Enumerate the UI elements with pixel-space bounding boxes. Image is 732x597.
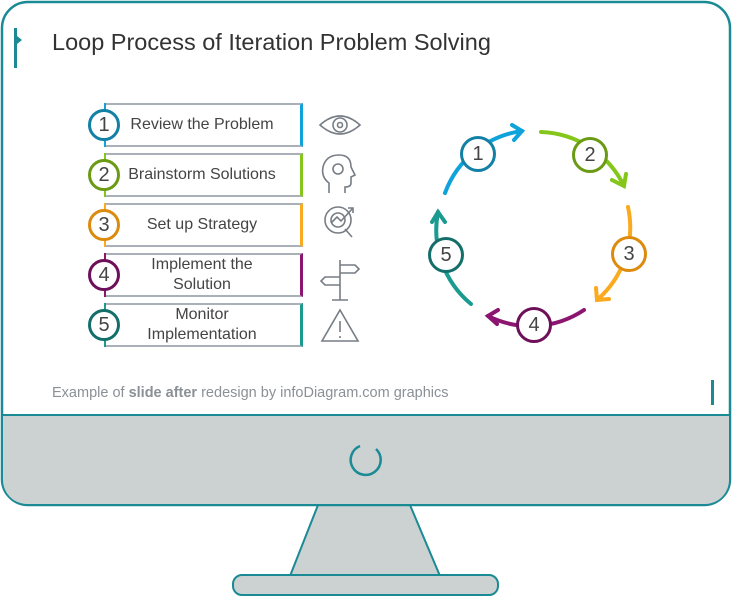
step list: Implementation	[147, 326, 257, 343]
cycle nodes: 2	[584, 144, 596, 166]
icons	[318, 115, 362, 342]
icon: power button	[351, 446, 381, 475]
step list: 5	[98, 314, 110, 336]
arc 1	[445, 125, 522, 193]
footer caption: Example of slide after redesign by infoDiagram.com graphics	[52, 385, 449, 401]
icon: target	[325, 207, 353, 237]
step list: Brainstorm Solutions	[128, 166, 276, 183]
step 3	[88, 203, 303, 247]
cycle nodes: 5	[440, 244, 452, 266]
step list	[88, 103, 303, 347]
icon: eye	[320, 116, 360, 134]
cycle nodes: 3	[623, 242, 635, 264]
step list: 3	[98, 214, 110, 236]
step list: 4	[98, 264, 110, 286]
icon: signpost	[321, 260, 359, 300]
step 1	[88, 103, 303, 147]
cycle nodes	[428, 136, 647, 343]
cycle nodes: 4	[528, 314, 540, 336]
icon: head gear	[323, 155, 355, 193]
step list: Monitor	[175, 306, 229, 323]
step 4	[88, 253, 303, 297]
arc 5	[432, 212, 471, 304]
step 2	[88, 153, 303, 197]
arc 4	[488, 310, 584, 326]
step list: Set up Strategy	[147, 216, 257, 233]
step list: Solution	[173, 276, 231, 293]
step list: Review the Problem	[130, 116, 274, 133]
accent bar	[14, 28, 22, 68]
icon: warning	[322, 310, 358, 341]
step list: Implement the	[151, 256, 253, 273]
step list: 2	[98, 164, 110, 186]
stand	[233, 505, 498, 595]
arc 2	[541, 132, 626, 186]
step 5	[88, 303, 303, 347]
title: Loop Process of Iteration Problem Solving	[52, 29, 491, 55]
cycle nodes: 1	[472, 142, 484, 164]
step list: 1	[98, 114, 110, 136]
arc 3	[596, 207, 630, 300]
